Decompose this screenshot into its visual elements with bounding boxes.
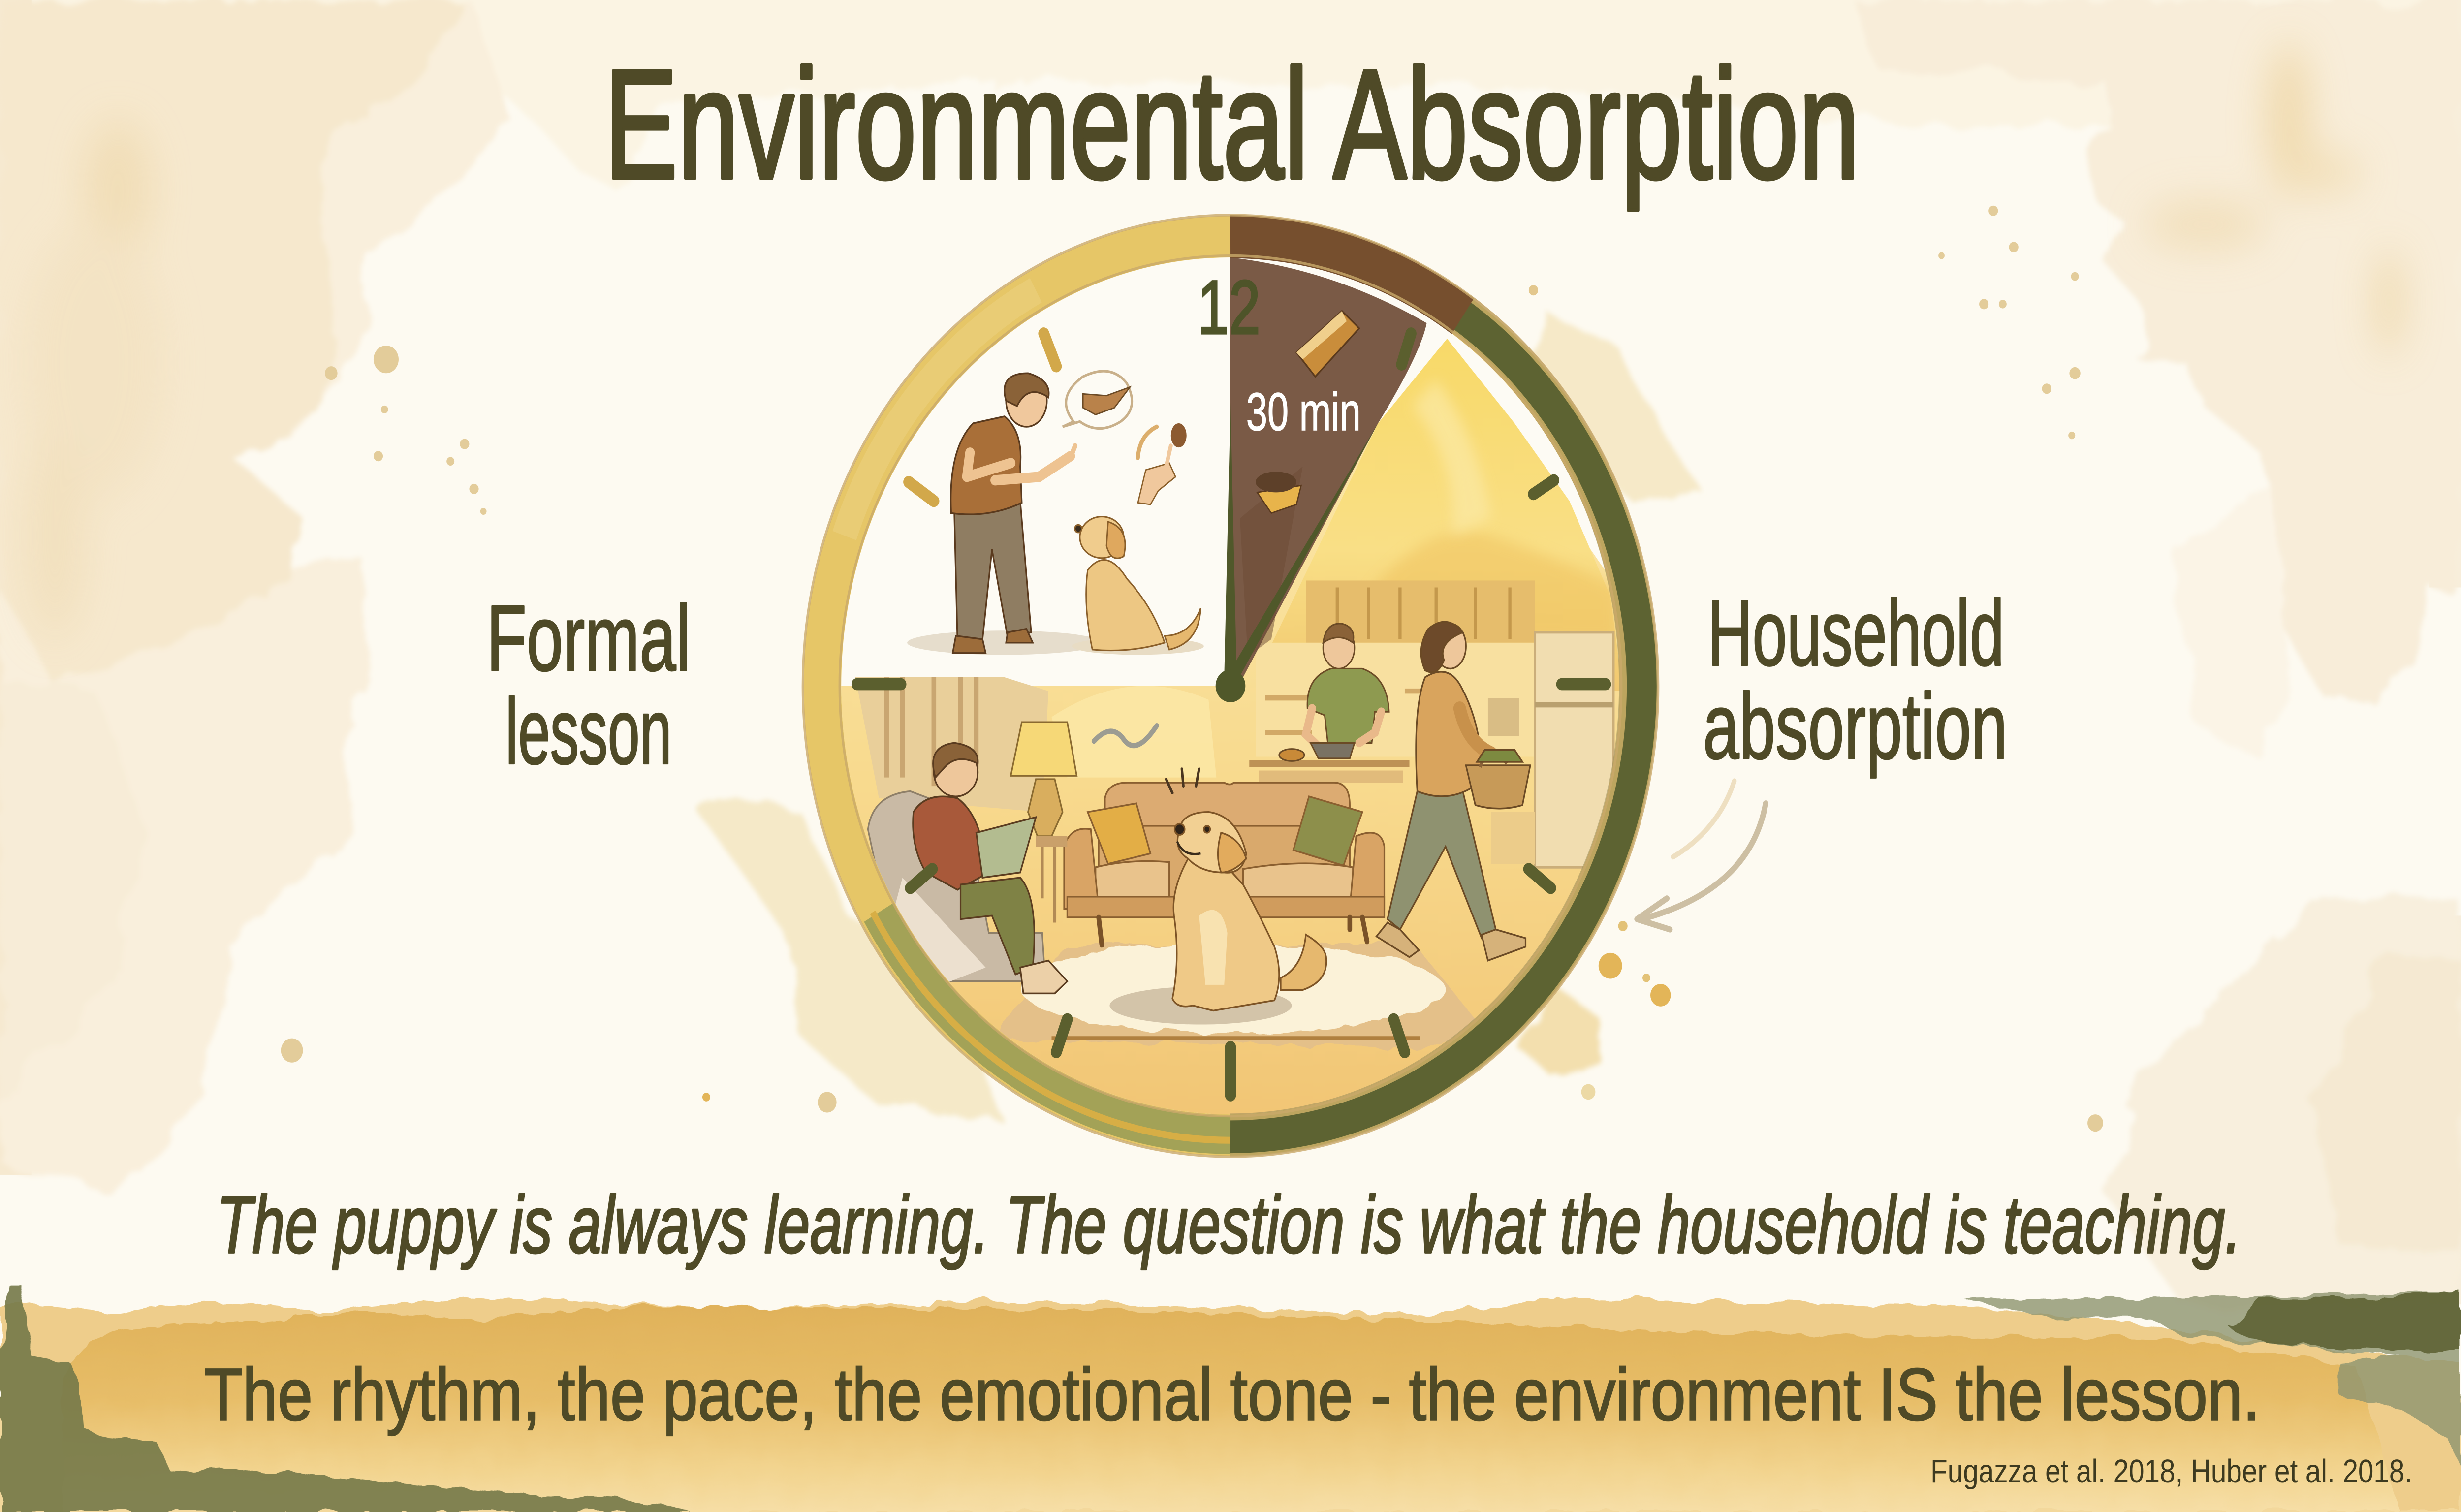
white lesson quadrant: formal lesson scene	[907, 371, 1204, 655]
person reading	[913, 743, 1067, 993]
alert marks above dog	[1166, 769, 1199, 793]
clock hands	[1216, 403, 1378, 702]
icon: chew stick	[1296, 311, 1359, 377]
arrow to household slice	[1637, 781, 1766, 929]
label: formal lesson: lesson	[505, 680, 672, 784]
cook in green shirt	[1279, 624, 1389, 761]
household scene: 23.5 hours of absorption	[838, 339, 1623, 1140]
hour ticks	[857, 333, 1606, 1095]
right wash	[1854, 0, 2461, 703]
lower room floor	[841, 421, 1619, 1114]
clock face	[838, 254, 1623, 1118]
kitchen cabinets	[1256, 580, 1535, 756]
lower right wash	[2103, 898, 2461, 1304]
puppy sitting	[1072, 517, 1204, 655]
brown 30 minute wedge	[1230, 257, 1427, 683]
label: formal lesson	[487, 586, 691, 784]
title wash	[455, 0, 2110, 195]
bottom banner	[0, 1286, 2461, 1512]
golden retriever, center	[1166, 769, 1326, 1010]
speech bubble with pointing hand	[1063, 371, 1132, 429]
sofa pillows	[1088, 803, 1150, 864]
trainer	[907, 373, 1102, 655]
sofa	[1064, 783, 1384, 945]
numeral 12: 12	[1198, 265, 1261, 350]
label: formal lesson: Formal	[487, 586, 691, 691]
label: household absorption: Household	[1707, 581, 2004, 685]
ink stains and splatter around the clock	[281, 206, 2103, 1132]
left wash, outer	[0, 0, 513, 1192]
clock ring	[803, 215, 1658, 1157]
rug	[993, 942, 1475, 1047]
treat hand and kibble	[1138, 423, 1187, 504]
olive wash right	[1962, 1292, 2461, 1469]
lamp	[1011, 722, 1077, 922]
30 min label: 30 min	[1246, 382, 1361, 442]
kitchen counter	[1249, 760, 1410, 783]
icon: treat pouch	[1256, 472, 1301, 513]
title: Environmental Absorption	[604, 37, 1860, 212]
label: household absorption: absorption	[1703, 674, 2007, 779]
label: household absorption	[1703, 581, 2007, 779]
citation: Fugazza et al. 2018, Huber et al. 2018.	[1930, 1452, 2412, 1489]
left wash, inner	[0, 0, 462, 688]
reader's armchair	[868, 791, 1045, 985]
clock	[803, 215, 1658, 1157]
kitchen wall wash	[1256, 339, 1623, 691]
banner message: The rhythm, the pace, the emotional tone - the environment IS the lesson.	[204, 1353, 2260, 1436]
olive wash left	[0, 1286, 691, 1512]
wavy scent line	[1094, 725, 1157, 746]
living room wall	[855, 677, 1216, 812]
fridge	[1488, 632, 1613, 867]
woman walking with basket	[1377, 622, 1530, 961]
